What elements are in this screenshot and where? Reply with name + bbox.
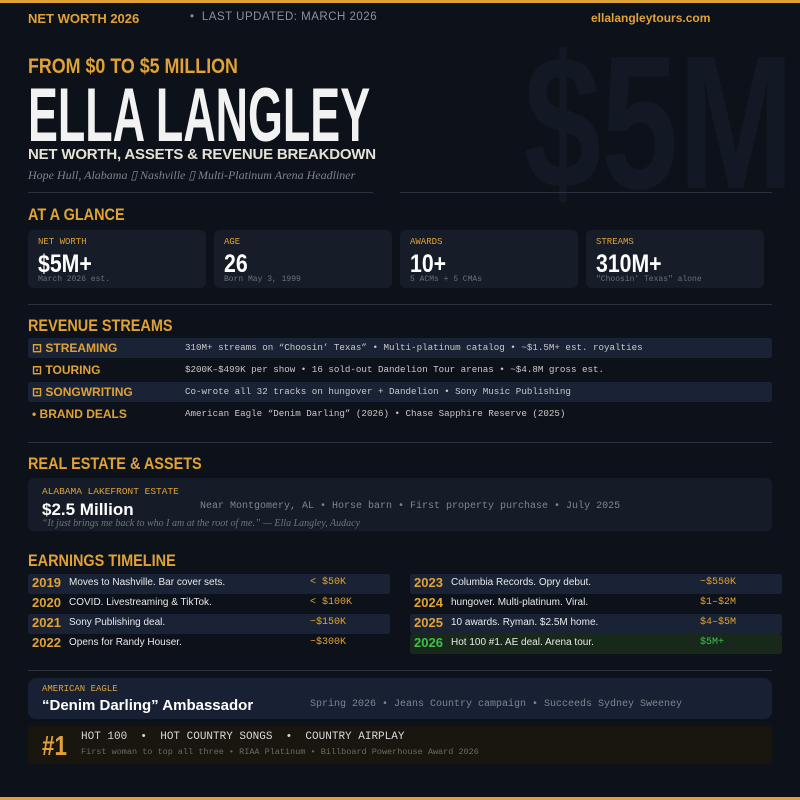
right column: Columbia Records. Opry debut. xyxy=(451,577,591,588)
row: songwriting: ⊡ SONGWRITING xyxy=(32,385,133,399)
right column: hungover. Multi-platinum. Viral. xyxy=(451,597,588,608)
right column: $4–$5M xyxy=(700,617,736,628)
left column: 2019 xyxy=(32,575,61,590)
card: streams: 310M+ xyxy=(596,250,662,278)
row: touring xyxy=(32,363,604,377)
header: website: ellalangleytours.com xyxy=(591,11,710,25)
panel: estate: “It just brings me back to who I am at the root of me.” — Ella Langley, Audacy xyxy=(42,518,360,529)
row: streaming: 310M+ streams on “Choosin’ Texas” • Multi-platinum catalog • ~$1.5M+ est. royalties xyxy=(185,342,643,353)
left column: < $100K xyxy=(310,597,352,608)
left column: Sony Publishing deal. xyxy=(69,617,165,628)
stat cards xyxy=(28,230,764,288)
row: touring: $200K–$499K per show • 16 sold-out Dandelion Tour arenas • ~$4.8M gross est. xyxy=(185,364,604,375)
right column: ~$550K xyxy=(700,577,736,588)
row: streaming xyxy=(28,338,772,358)
card: streams xyxy=(586,230,764,288)
panel: american eagle xyxy=(28,678,772,719)
right column: 2024 xyxy=(414,595,443,610)
right column: Hot 100 #1. AE deal. Arena tour. xyxy=(451,637,594,648)
panel: estate xyxy=(28,478,772,531)
right column: 2026 xyxy=(414,635,443,650)
header: last updated: • LAST UPDATED: MARCH 2026 xyxy=(190,11,377,23)
right column: $5M+ xyxy=(700,637,724,648)
left column: COVID. Livestreaming & TikTok. xyxy=(69,597,212,608)
timeline xyxy=(28,574,782,654)
left column: ~$150K xyxy=(310,617,346,628)
card: streams: STREAMS xyxy=(596,237,634,247)
row: touring: ⊡ TOURING xyxy=(32,363,101,377)
header: net worth 2026: NET WORTH 2026 xyxy=(28,11,139,26)
panel: #1: HOT 100 • HOT COUNTRY SONGS • COUNTRY AIRPLAY xyxy=(81,731,404,743)
card: net worth: $5M+ xyxy=(38,250,92,278)
left column: Opens for Randy Houser. xyxy=(69,637,182,648)
left column xyxy=(28,574,390,650)
panel: #1 xyxy=(28,726,772,764)
panel: #1: First woman to top all three • RIAA Platinum • Billboard Powerhouse Award 2026 xyxy=(81,747,479,757)
heading: at a glance: AT A GLANCE xyxy=(28,205,125,224)
right column: 2023 xyxy=(414,575,443,590)
row: streaming: ⊡ STREAMING xyxy=(32,341,117,355)
row: brand deals: American Eagle “Denim Darling” (2026) • Chase Sapphire Reserve (2025) xyxy=(185,408,565,419)
row: brand deals xyxy=(32,407,565,421)
row: songwriting xyxy=(28,382,772,402)
card: net worth: March 2026 est. xyxy=(38,275,110,284)
right column xyxy=(410,574,782,654)
card: age: 26 xyxy=(224,250,248,278)
left column: 2020 xyxy=(32,595,61,610)
right column: 2025 xyxy=(414,615,443,630)
left column: ~$300K xyxy=(310,637,346,648)
card: age: Born May 3, 1999 xyxy=(224,275,301,284)
left column: 2022 xyxy=(32,635,61,650)
tagline: Hope Hull, Alabama ▯ Nashville ▯ Multi-Platinum Arena Headliner xyxy=(28,168,355,182)
card: streams: "Choosin' Texas" alone xyxy=(596,275,702,284)
panel: #1: #1 xyxy=(42,730,67,761)
panel: american eagle: AMERICAN EAGLE xyxy=(42,684,118,694)
heading: earnings timeline: EARNINGS TIMELINE xyxy=(28,551,176,570)
revenue rows xyxy=(28,338,772,421)
panel: american eagle: Spring 2026 • Jeans Country campaign • Succeeds Sydney Sweeney xyxy=(310,699,682,710)
panel: american eagle: “Denim Darling” Ambassador xyxy=(42,697,253,714)
right column: 10 awards. Ryman. $2.5M home. xyxy=(451,617,598,628)
card: awards: AWARDS xyxy=(410,237,442,247)
card: net worth xyxy=(28,230,206,288)
left column: < $50K xyxy=(310,577,346,588)
panel: estate: ALABAMA LAKEFRONT ESTATE xyxy=(42,486,179,497)
panel: estate: Near Montgomery, AL • Horse barn • First property purchase • July 2025 xyxy=(200,501,620,512)
card: age: AGE xyxy=(224,237,240,247)
subtitle: from $0 to $5 million: FROM $0 TO $5 MILLION xyxy=(28,55,238,78)
card: age xyxy=(214,230,392,288)
left column: Moves to Nashville. Bar cover sets. xyxy=(69,577,225,588)
left column: 2021 xyxy=(32,615,61,630)
row: songwriting: Co-wrote all 32 tracks on hungover + Dandelion • Sony Music Publishing xyxy=(185,386,571,397)
row: brand deals: • BRAND DEALS xyxy=(32,407,127,421)
watermark: $5M: $5M xyxy=(524,17,794,229)
subtitle: breakdown: NET WORTH, ASSETS & REVENUE BREAKDOWN xyxy=(28,146,376,163)
right column: $1–$2M xyxy=(700,597,736,608)
card: net worth: NET WORTH xyxy=(38,237,87,247)
heading: revenue streams: REVENUE STREAMS xyxy=(28,316,173,335)
panel: estate: $2.5 Million xyxy=(42,500,134,519)
heading: real estate: REAL ESTATE & ASSETS xyxy=(28,454,202,473)
card: awards: 5 ACMs + 5 CMAs xyxy=(410,275,482,284)
title: Ella Langley: ELLA LANGLEY xyxy=(28,73,370,158)
card: awards: 10+ xyxy=(410,250,446,278)
card: awards xyxy=(400,230,578,288)
